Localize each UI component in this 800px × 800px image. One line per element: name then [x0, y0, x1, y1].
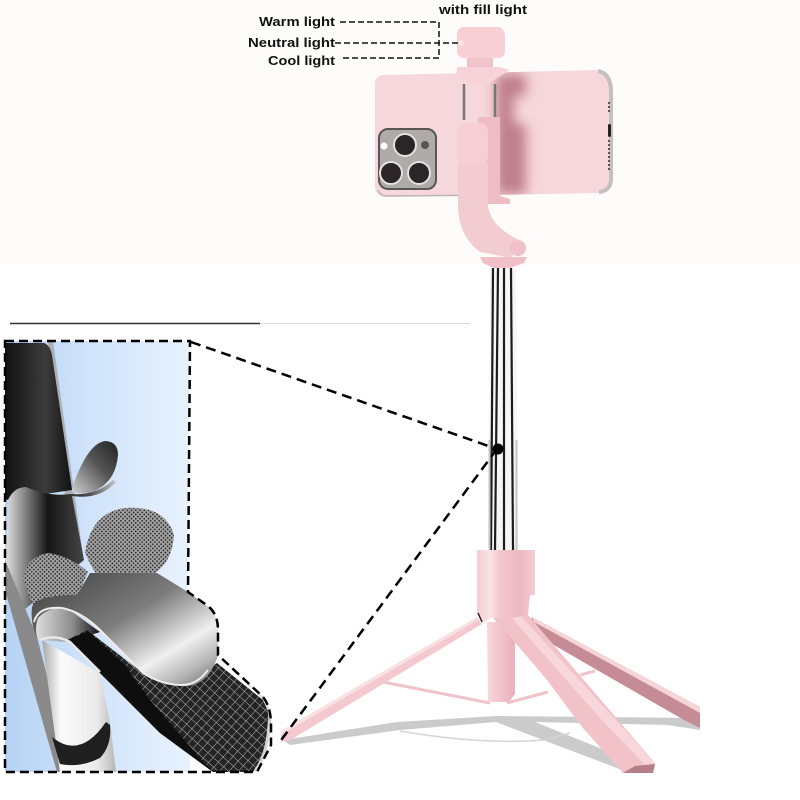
callout anchor dot	[492, 444, 504, 454]
label: with fill light: with fill light	[438, 2, 528, 17]
base cylinder	[477, 550, 535, 623]
clamp rods	[464, 84, 495, 120]
phone metal edge	[598, 71, 611, 192]
background	[0, 0, 800, 265]
frame slanted bar	[5, 560, 60, 772]
handle button	[457, 123, 488, 164]
mesh pad small	[23, 553, 88, 608]
mesh pad black band	[68, 631, 213, 772]
black ring	[52, 722, 110, 765]
upper clip	[6, 480, 116, 610]
swivel knob	[510, 240, 526, 256]
small clip tongue	[72, 441, 118, 493]
light neck	[467, 56, 493, 67]
top clamp	[456, 67, 510, 86]
zoom panel dashed outline	[5, 341, 271, 772]
mesh pad round	[85, 508, 174, 573]
lobe white edge	[34, 608, 208, 685]
centre column	[487, 622, 515, 702]
phone bottom edge	[378, 190, 500, 196]
mesh pad bottom	[67, 630, 272, 772]
label leader lines	[335, 22, 458, 58]
fill light	[457, 27, 505, 58]
shadow of tripod	[283, 716, 700, 770]
lens top	[394, 134, 416, 156]
label: cool light: Cool light	[268, 53, 336, 68]
phone body	[375, 70, 613, 197]
phone edge silver	[48, 341, 83, 560]
left leg	[281, 617, 482, 742]
label: warm light: Warm light	[259, 14, 336, 29]
zoom detail panel	[5, 341, 272, 772]
phone shadow	[496, 74, 526, 194]
light lens	[458, 40, 464, 46]
camera module	[379, 129, 436, 189]
silver rim under lobe	[40, 637, 100, 672]
mesh pad white rim	[221, 656, 270, 771]
curved arm	[458, 162, 519, 258]
rear clamp arm	[478, 117, 510, 204]
phone side buttons	[608, 102, 611, 172]
tripod	[281, 550, 700, 773]
pole shading	[490, 440, 516, 550]
phone edge	[5, 343, 72, 500]
lens bottom right	[408, 162, 430, 184]
struts	[383, 671, 595, 703]
light labels	[248, 2, 528, 68]
swivel base	[480, 257, 527, 268]
base joint mark	[478, 613, 482, 622]
back right leg	[528, 617, 700, 728]
flash	[380, 142, 388, 150]
telescopic pole	[488, 268, 518, 550]
pole dark lines	[491, 268, 513, 550]
detail background	[5, 341, 190, 772]
front leg	[493, 614, 655, 773]
lower metal lobe	[32, 573, 218, 686]
label: neutral light: Neutral light	[248, 35, 336, 50]
under-lobe metal	[33, 608, 100, 642]
phone	[375, 70, 613, 197]
callout lines	[191, 342, 497, 743]
white cylinder	[42, 640, 116, 772]
sensor	[421, 141, 429, 149]
pole side glow	[488, 268, 518, 550]
selfie stick head	[456, 27, 527, 268]
lens bottom left	[380, 162, 402, 184]
top rule	[10, 322, 470, 324]
